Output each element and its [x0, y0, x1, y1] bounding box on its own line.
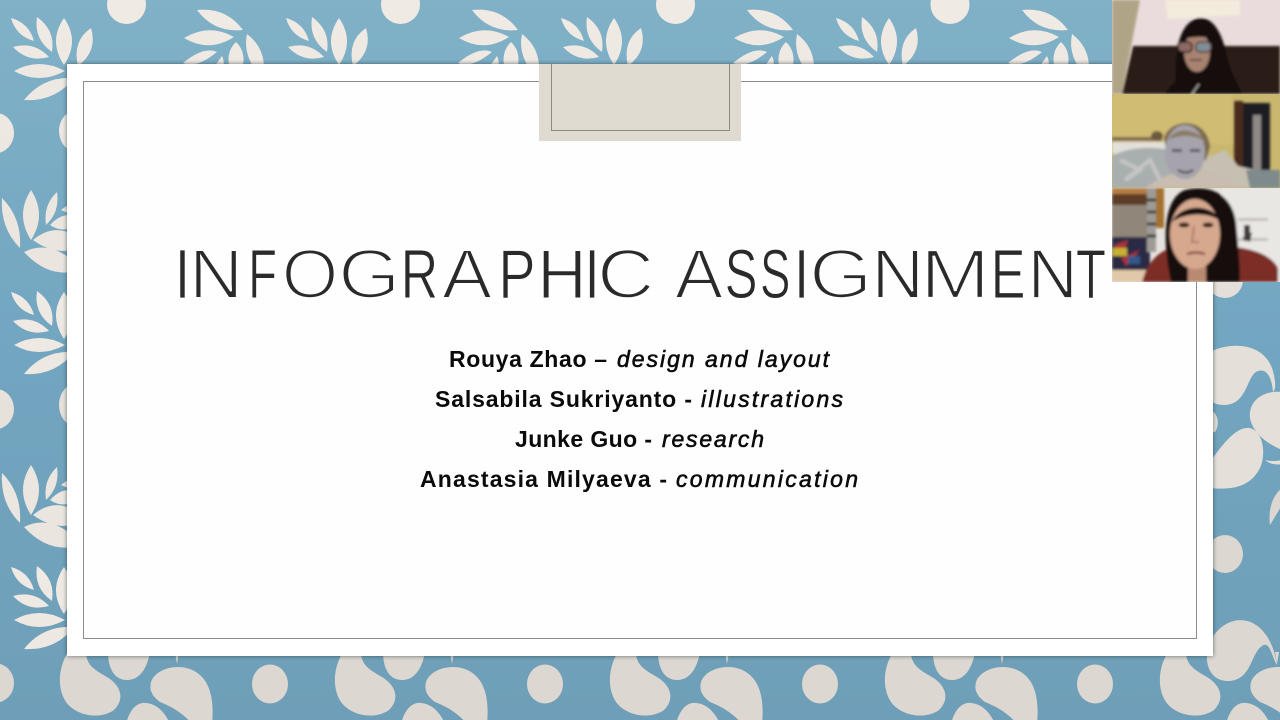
credit: Anastasia Milyaeva: Anastasia Milyaeva -: [420, 466, 667, 492]
title: G: [338, 235, 400, 313]
title: I: [584, 235, 600, 313]
title: I: [175, 235, 190, 313]
title: G: [809, 235, 873, 313]
credit: Rouya Zhao: design and layout: [617, 346, 831, 372]
credit: Junke Guo: research: [662, 426, 764, 452]
title: N: [189, 235, 243, 313]
video tile: woman with glasses: [1112, 0, 1280, 94]
slide card: [67, 64, 1213, 656]
leaf and dot pattern: [0, 0, 1089, 649]
title: T: [1076, 235, 1106, 313]
title: H: [537, 235, 587, 313]
title: F: [248, 235, 277, 313]
team credits: [420, 346, 858, 492]
title: S: [725, 235, 758, 313]
credit: Junke Guo: Junke Guo -: [515, 426, 652, 452]
credit: Anastasia Milyaeva: communication: [676, 466, 858, 492]
paisley pattern: [0, 488, 1280, 720]
video tile: woman in bedroom: [1112, 188, 1280, 282]
title: N: [872, 235, 924, 313]
video call tiles: [1112, 0, 1280, 282]
title: O: [282, 235, 338, 313]
video tile: woman in yellow room: [1112, 94, 1280, 188]
credit: Salsabila Sukriyanto: illustrations: [701, 386, 844, 412]
title: N: [1028, 235, 1078, 313]
credit: Salsabila Sukriyanto: Salsabila Sukriyanto -: [435, 386, 692, 412]
right paisley column: [1207, 262, 1280, 489]
title: A: [442, 235, 492, 313]
title: A: [675, 235, 723, 313]
title: P: [498, 235, 536, 313]
title: M: [920, 235, 990, 313]
title: I: [794, 235, 809, 313]
title: R: [401, 235, 438, 313]
inner frame: [84, 82, 1196, 638]
title: C: [597, 235, 654, 313]
top tab: [539, 64, 741, 141]
title: E: [991, 235, 1025, 313]
credit: Rouya Zhao: Rouya Zhao –: [449, 346, 607, 372]
title: S: [760, 235, 790, 313]
